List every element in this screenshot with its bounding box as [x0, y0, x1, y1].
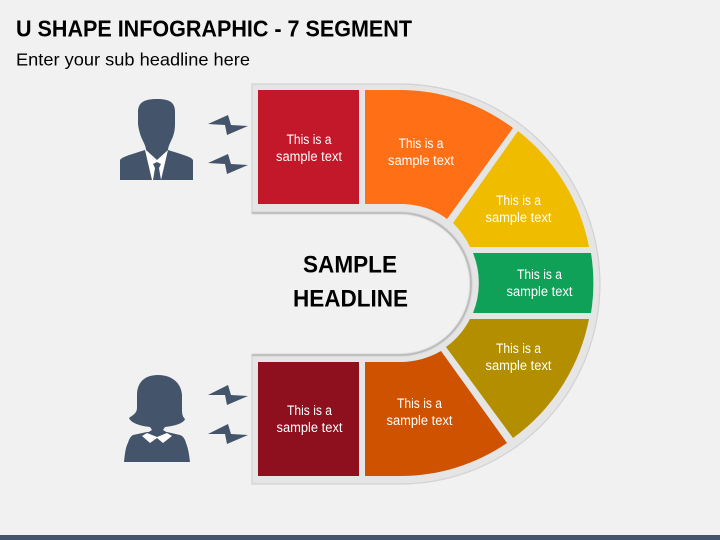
segment 7: maroon	[258, 362, 359, 476]
segment 7: maroon: This is a	[287, 403, 332, 418]
icon: businessman	[120, 99, 193, 180]
center headline: SAMPLE	[303, 252, 397, 278]
subtitle: Enter your sub headline here	[16, 50, 250, 70]
segment 6: burnt orange: This is a	[397, 396, 442, 411]
segment 1: red: This is a	[286, 132, 332, 147]
title: U SHAPE INFOGRAPHIC - 7 SEGMENT	[16, 16, 413, 42]
segment 2: orange	[365, 90, 513, 219]
segment 6: burnt orange	[365, 351, 507, 476]
segment 1: red	[258, 90, 359, 204]
segment 3: yellow: This is a	[496, 193, 541, 208]
icon: bolt upper woman	[208, 385, 248, 405]
center headline	[293, 252, 408, 312]
segment 2: orange: This is a	[398, 136, 444, 151]
segment 5: dark gold: sample text	[486, 358, 552, 373]
segment 5: dark gold: This is a	[496, 341, 541, 356]
segment 2: orange: sample text	[388, 153, 454, 168]
center headline: HEADLINE	[293, 286, 408, 312]
bottom bar	[0, 535, 720, 540]
icon: bolt lower woman	[208, 424, 248, 444]
segment 4: green	[473, 253, 593, 313]
segment 5: dark gold	[446, 319, 589, 438]
icon: businesswoman	[124, 375, 190, 462]
segment 4: green: This is a	[517, 267, 562, 282]
segment 6: burnt orange: sample text	[386, 413, 453, 428]
segment 7: maroon: sample text	[276, 420, 343, 435]
segment 3: yellow: sample text	[486, 210, 552, 225]
U shape background	[252, 84, 600, 484]
icon: bolt upper man	[208, 115, 248, 135]
icon: bolt lower man	[208, 154, 248, 174]
segment 4: green: sample text	[506, 284, 573, 299]
segment 1: red: sample text	[276, 149, 342, 164]
segment 3: yellow	[453, 131, 589, 247]
